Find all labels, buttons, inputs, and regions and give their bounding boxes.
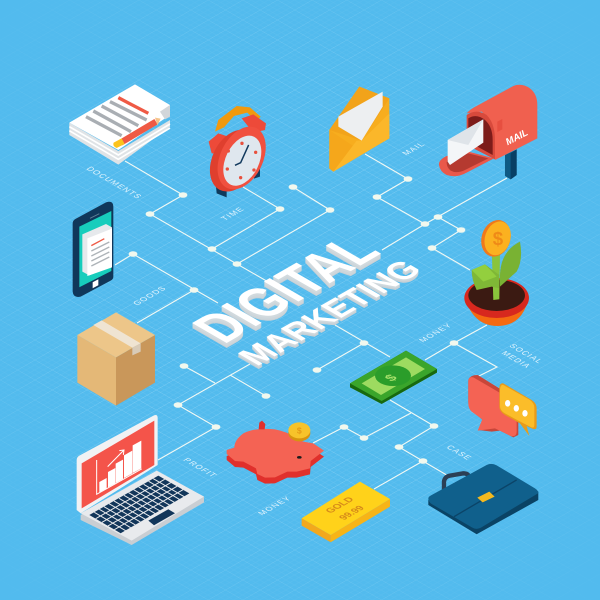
icon: banknote: $ — [381, 372, 401, 383]
icon: mailbox: MAIL — [504, 127, 530, 148]
icon: cardboard box — [77, 312, 155, 406]
icon: laptop with chart — [77, 415, 204, 545]
icon: gold bar: GOLD — [323, 496, 357, 515]
title: DIGITAL: DIGITAL — [179, 227, 394, 351]
icon: mailbox — [439, 85, 537, 179]
icon: speech bubbles — [468, 375, 537, 437]
icon: documents stack — [69, 84, 170, 165]
title: MARKETING: MARKETING — [230, 255, 430, 370]
label: social media — [499, 343, 545, 370]
label: documents: DOCUMENTS — [84, 165, 144, 200]
icon: plant with coin: $ — [493, 228, 504, 249]
icon: piggy bank — [227, 421, 324, 484]
icon: banknote — [350, 351, 437, 404]
label: social media: SOCIAL — [507, 343, 545, 365]
icon: plant with coin — [464, 216, 529, 326]
icon: smartphone — [73, 202, 113, 297]
label: mail: MAIL — [400, 141, 428, 157]
icon: piggy bank: $ — [297, 426, 302, 436]
label: profit: PROFIT — [181, 457, 219, 479]
icon: gold bar: 99.99 — [337, 504, 368, 522]
label: money right: MONEY — [417, 322, 455, 344]
label: money bottom: MONEY — [256, 495, 294, 517]
flowchart connector lines — [115, 154, 507, 489]
icon: alarm clock — [200, 106, 275, 200]
label: time: TIME — [219, 206, 247, 222]
connector nodes — [129, 176, 465, 464]
icon: open envelope — [329, 87, 389, 172]
label: case: CASE — [444, 444, 474, 461]
icon: gold bar — [302, 482, 390, 542]
label: social media: MEDIA — [499, 350, 533, 370]
icon: briefcase — [428, 464, 538, 534]
label: goods: GOODS — [131, 285, 169, 307]
